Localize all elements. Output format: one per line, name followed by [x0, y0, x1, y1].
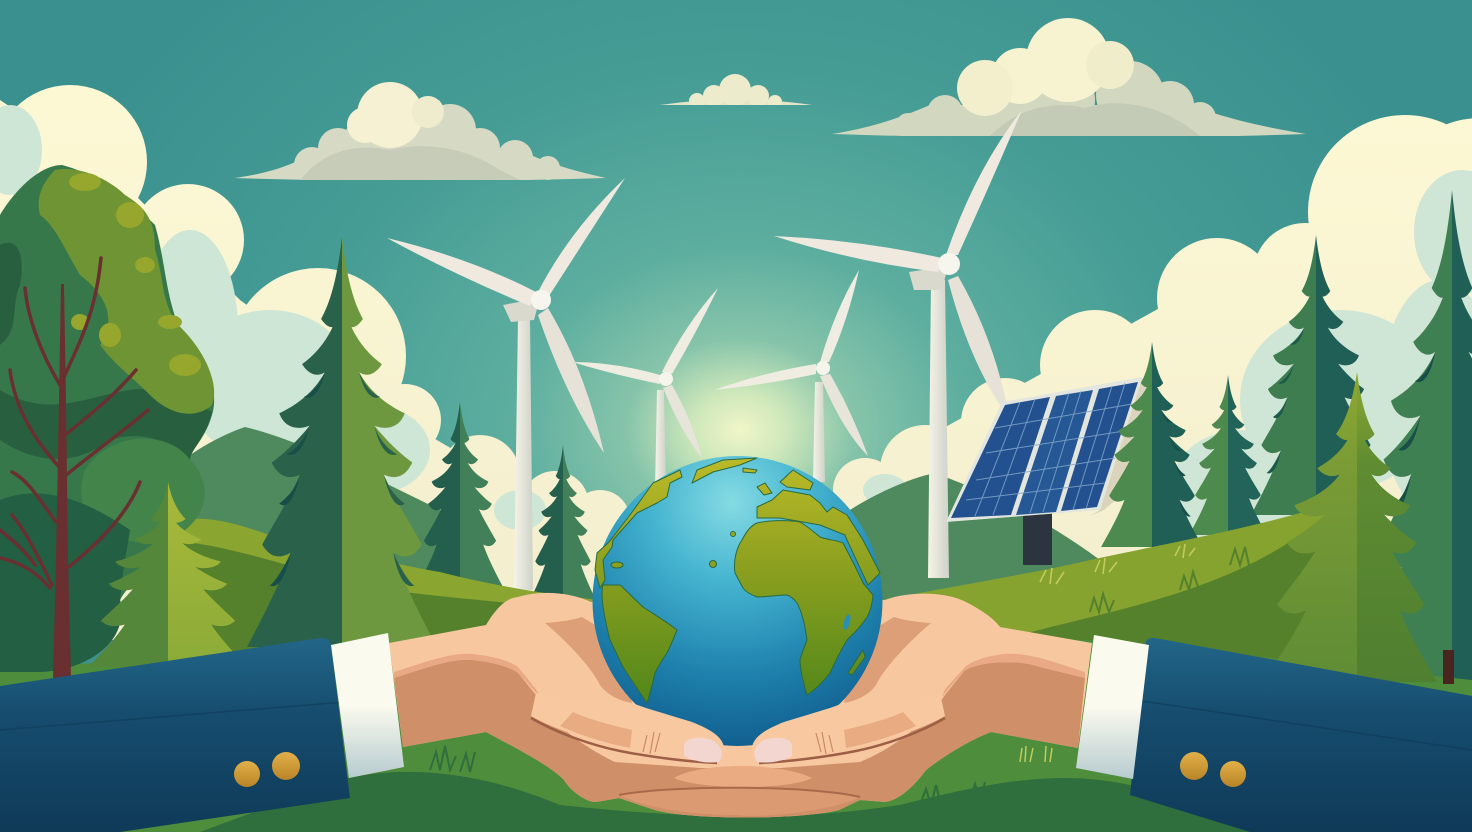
right sleeve: [1076, 635, 1472, 832]
bare tree: [0, 258, 148, 678]
cloud shadow: left: [0, 105, 546, 530]
pine: beside solar panel: [1101, 342, 1203, 547]
globe: [592, 456, 882, 746]
island: Madagascar: [848, 650, 865, 675]
cloud: top centre-left: [234, 82, 606, 183]
island: north: [743, 468, 757, 473]
pine: small right: [1189, 375, 1267, 535]
button: right outer: [1220, 761, 1246, 787]
left sleeve: [0, 633, 404, 832]
button: left inner: [272, 752, 300, 780]
cloud bank: left: [0, 85, 640, 640]
large leafy tree: [0, 165, 214, 672]
foreground trunk: right: [1443, 650, 1454, 684]
island: Britain: [757, 483, 772, 495]
foreground pine: left large: [247, 237, 437, 647]
button: right inner: [1180, 752, 1208, 780]
cuff: right: [1076, 635, 1149, 779]
foreground pine: right light: [1262, 372, 1437, 682]
cloud shadow: right: [863, 170, 1472, 550]
cloud bank: right: [833, 115, 1472, 640]
hands: palm base: [389, 593, 1092, 818]
pine: tall right: [1251, 235, 1381, 515]
cloud: small top centre: [660, 74, 812, 105]
grass hill: right: [882, 512, 1350, 700]
wind turbine: large left: [387, 178, 625, 590]
cloud: top right: [832, 18, 1306, 138]
pine: tall far right: [1360, 190, 1472, 680]
pine: small behind left hump: [530, 445, 596, 600]
hand: left fingers: [531, 693, 725, 763]
continent: Greenland: [692, 458, 757, 483]
continent: North America: [595, 470, 682, 588]
continent: Africa and Arabia: [734, 521, 873, 695]
cuff: left: [331, 633, 404, 778]
island: Caribbean: [611, 562, 623, 568]
continent: Eurasia: [757, 490, 880, 585]
button: left outer: [234, 761, 260, 787]
pine: behind left hump: [417, 402, 503, 587]
distant hills: [170, 427, 1100, 610]
foreground pine: left light: [88, 482, 248, 667]
hand: right fingers: [751, 693, 945, 763]
solar panel: [946, 377, 1160, 565]
continent: South America: [602, 585, 677, 703]
wind turbine: large right: [774, 110, 1022, 578]
wind turbine: small right: [714, 270, 868, 482]
grass hill: left: [170, 519, 600, 670]
foreground meadow: [0, 640, 1472, 832]
wind turbine: small left: [572, 288, 718, 490]
continent: Scandinavia: [780, 470, 813, 490]
